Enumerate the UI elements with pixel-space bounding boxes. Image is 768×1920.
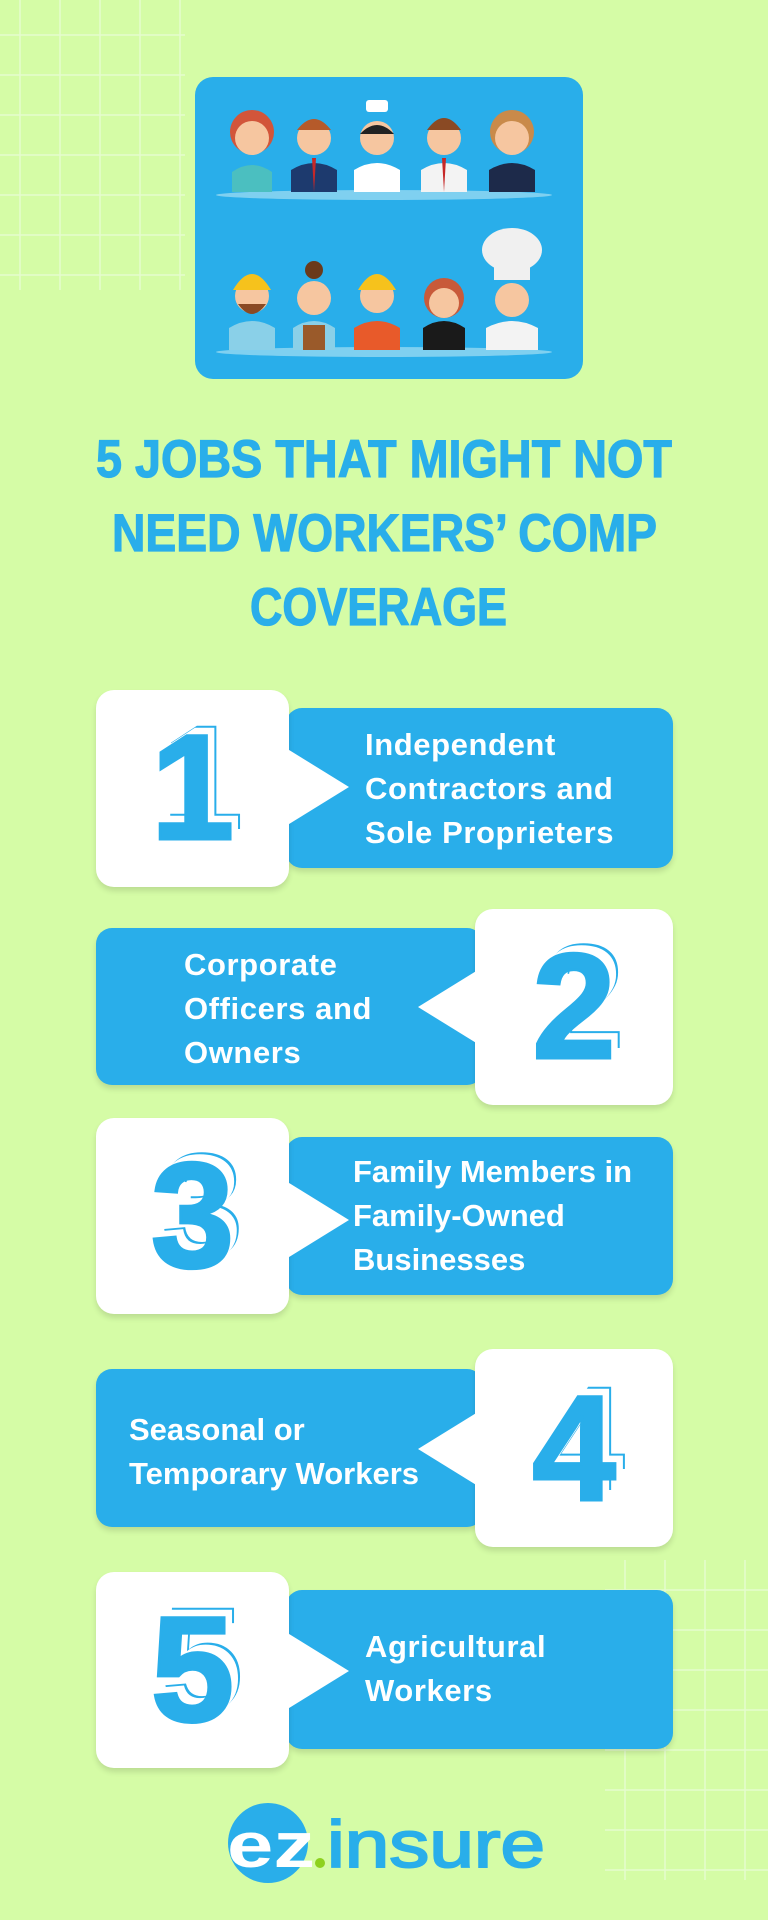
panel: item 1 [94, 690, 674, 892]
panel: item 4 [94, 1349, 674, 1552]
number 4: 4 [532, 1364, 616, 1532]
title [96, 430, 672, 637]
text: item 1: Sole Proprieters [365, 815, 614, 850]
text: item 4: Seasonal or [129, 1412, 305, 1447]
text: item 3: Family Members in [353, 1154, 632, 1189]
text: item 3: Family-Owned [353, 1198, 565, 1233]
text: item 2: Corporate [184, 947, 338, 982]
number 1: 1 [151, 703, 234, 871]
text: item 4: Temporary Workers [129, 1456, 419, 1491]
logo: ez insure: insure [327, 1807, 545, 1881]
text: item 2 [184, 947, 372, 1070]
text: item 5 [365, 1629, 546, 1708]
panel: item 5 [94, 1572, 674, 1774]
panel: item 2 [94, 909, 674, 1110]
title: COVERAGE [250, 578, 507, 637]
panel: item 3 [94, 1118, 674, 1320]
text: item 1: Contractors and [365, 771, 613, 806]
title: NEED WORKERS’ COMP [112, 504, 657, 563]
number 3: 3 [151, 1131, 234, 1299]
logo: ez insure [227, 1803, 545, 1883]
text: item 2: Owners [184, 1035, 301, 1070]
text: item 4 [129, 1412, 419, 1491]
text: item 5: Agricultural [365, 1629, 546, 1664]
title: 5 JOBS THAT MIGHT NOT [96, 430, 672, 489]
text: item 2: Officers and [184, 991, 372, 1026]
text: item 3: Businesses [353, 1242, 525, 1277]
text: item 5: Workers [365, 1673, 493, 1708]
logo: ez insure: ez [227, 1809, 315, 1881]
number 2: 2 [532, 922, 616, 1090]
text: item 3 [353, 1154, 632, 1277]
text: item 1: Independent [365, 727, 556, 762]
panel: people illustration [195, 77, 583, 379]
text: item 1 [365, 727, 614, 850]
number 5: 5 [151, 1585, 234, 1753]
